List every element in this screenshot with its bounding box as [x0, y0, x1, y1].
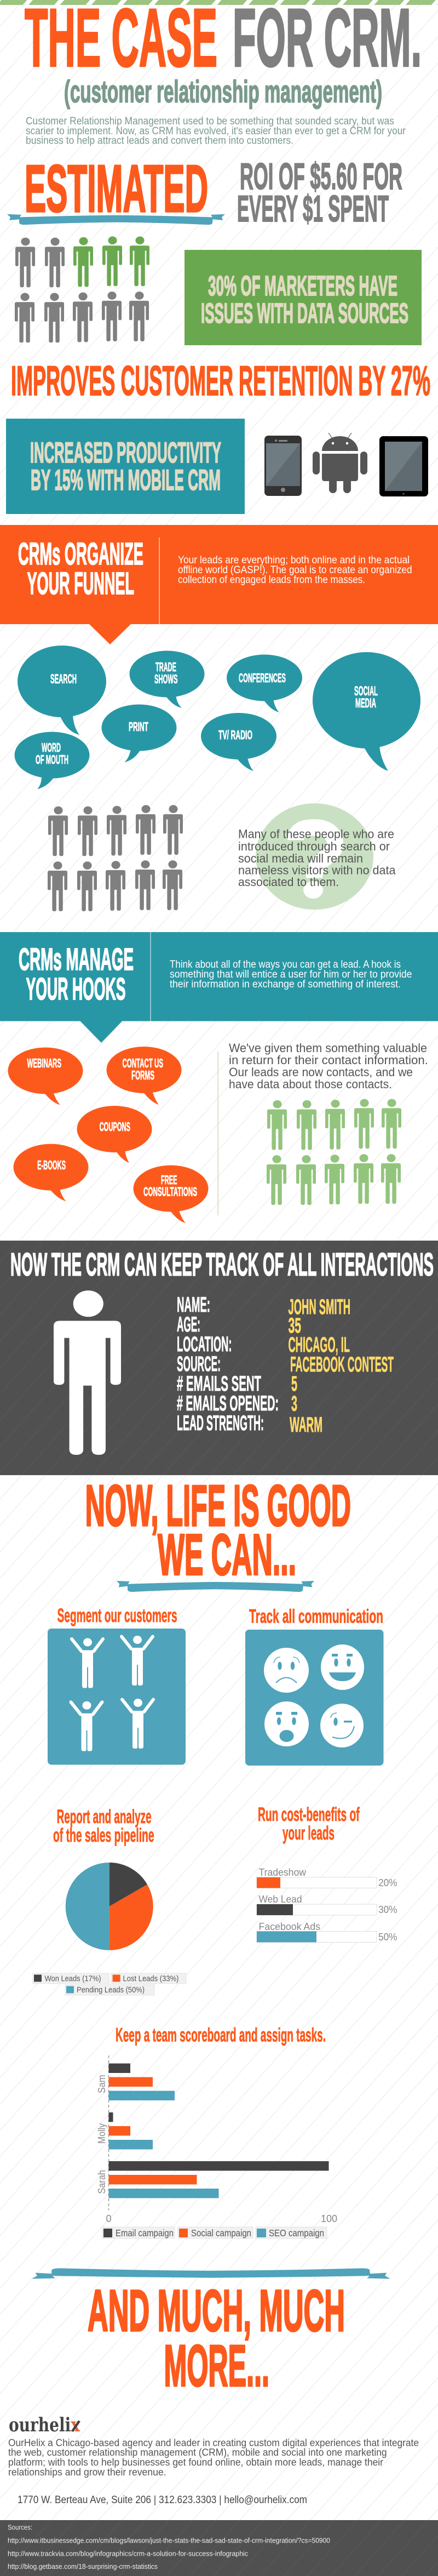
text: given them something valuable	[229, 1041, 428, 1091]
speech bubble: contact us forms	[106, 1047, 182, 1105]
text: nameless visitors: nameless visitors with no data	[238, 864, 396, 877]
intro paragraph	[26, 116, 406, 147]
icon: happy face	[321, 1644, 364, 1690]
speech bubble: conferences	[227, 654, 302, 712]
panel: CRMs organize your funnel: Your leads are everything; both online and in the actual	[178, 554, 410, 566]
speech bubble: trade shows: TRADE	[155, 660, 176, 674]
contact field labels	[177, 1293, 279, 1435]
heading: report and analyze: Report and analyze	[57, 1806, 152, 1827]
bar chart legend: Email campaign	[116, 2227, 174, 2238]
footer: sources: http://blog.getbase.com/18-surprising-crm-statistics	[8, 2562, 158, 2571]
icon: sad face	[264, 1648, 309, 1693]
text: about ourhelix: platform; with tools to help businesses get found online, obtain more leads, manage their	[8, 2457, 383, 2468]
bar chart: team scoreboard: 0	[106, 2213, 112, 2224]
bar chart legend: Social campaign	[191, 2227, 251, 2238]
icon: question mark circle	[256, 803, 373, 910]
heading: run cost-benefits: Run cost-benefits of	[258, 1804, 360, 1825]
speech bubble: search	[18, 646, 106, 735]
heading: report and analyze: of the sales pipeline	[53, 1825, 154, 1846]
heading: segment: Segment our customers	[57, 1605, 177, 1626]
speech bubble: webinars: WEBINARS	[27, 1056, 61, 1070]
footer: sources: Sources:	[8, 2523, 32, 2532]
contact field values: CHICAGO, IL	[288, 1333, 350, 1357]
text: given them something valuable: have data about those contacts.	[229, 1077, 392, 1091]
speech bubble: trade shows: SHOWS	[154, 672, 177, 686]
contact field values: JOHN SMITH	[288, 1295, 350, 1319]
panel: CRMs manage your hooks: their information in exchange of something of interest.	[170, 978, 401, 990]
text: nameless visitors: social media will remain	[238, 852, 363, 865]
speech bubble: coupons: COUPONS	[100, 1119, 130, 1134]
speech bubble: social media	[313, 652, 420, 771]
intro paragraph: business to help attract leads and convert them into customers.	[26, 135, 293, 147]
footer: sources: http://www.itbusinessedge.com/cm/blogs/lawson/just-the-stats-the-sad-sad-state-of-crm-integration/?cs=50900	[8, 2536, 330, 2545]
heading: now life is good: WE CAN...	[158, 1523, 296, 1587]
text: about ourhelix	[8, 2437, 419, 2478]
bar chart legend	[102, 2227, 327, 2238]
speech bubble: print: PRINT	[129, 719, 148, 734]
pie chart legend	[33, 1973, 186, 1995]
bar chart: team scoreboard	[96, 2055, 337, 2224]
icon: large person	[54, 1290, 121, 1455]
text: nameless visitors: Many of these people who are	[238, 827, 394, 841]
speech bubble: search: SEARCH	[50, 672, 77, 687]
text: given them something valuable: Our leads are now contacts, and we	[229, 1065, 413, 1079]
panel: CRMs manage your hooks: Think about all of the ways you can get a lead. A hook is	[170, 958, 401, 970]
icon: winking face	[320, 1704, 364, 1747]
contact field values: WARM	[290, 1413, 322, 1437]
panel: CRMs manage your hooks	[0, 932, 438, 1043]
speech bubble: free consultations	[134, 1165, 208, 1223]
panel: CRMs organize your funnel: CRMs ORGANIZE	[18, 536, 143, 572]
contact field values: 5	[291, 1372, 297, 1396]
text: nameless visitors: associated to them.	[238, 875, 339, 889]
heading: and much more with ribbon	[32, 2268, 390, 2398]
text: about ourhelix: the web, customer relationship management (CRM), mobile and social into one marketing	[8, 2447, 387, 2458]
icon group: ten gray people	[48, 805, 183, 911]
logo: ourhelix: ourhelix	[9, 2414, 80, 2436]
contact field labels: SOURCE:	[177, 1352, 221, 1376]
text: nameless visitors	[238, 827, 396, 889]
text: about ourhelix: relationships and grow their revenue.	[8, 2466, 166, 2478]
bar chart: team scoreboard: 100	[321, 2213, 337, 2224]
icon: android robot	[313, 433, 367, 493]
progress bars: cost benefits: Facebook Ads	[258, 1921, 320, 1932]
speech bubble: webinars	[8, 1048, 83, 1105]
panel: smiley faces	[245, 1630, 383, 1766]
ROI stat	[237, 156, 402, 230]
progress bars: cost benefits: Web Lead	[258, 1894, 302, 1905]
contact field labels: LEAD STRENGTH:	[177, 1412, 264, 1435]
panel: CRMs organize your funnel: YOUR FUNNEL	[27, 566, 134, 601]
progress bars: cost benefits: Tradeshow	[258, 1867, 307, 1878]
pie chart legend: Lost Leads (33%)	[123, 1974, 178, 1984]
heading: and much more with ribbon: MORE...	[164, 2333, 269, 2398]
panel: increased productivity: INCREASED PRODUCTIVITY	[30, 437, 221, 469]
contact field labels: LOCATION:	[177, 1333, 232, 1356]
panel: track all interactions	[0, 1241, 438, 1475]
footer: sources	[0, 2520, 438, 2576]
icon: surprised face	[264, 1701, 309, 1746]
intro paragraph: scarier to implement. Now, as CRM has evolved, it's easier than ever to get a CRM for your	[26, 125, 406, 137]
panel: CRMs manage your hooks: YOUR HOOKS	[26, 972, 126, 1007]
progress bars: cost benefits: 30%	[378, 1904, 397, 1915]
speech bubble: e-books	[13, 1144, 89, 1201]
speech bubble: word of mouth	[14, 732, 90, 789]
heading: report and analyze	[53, 1806, 154, 1846]
heading: run cost-benefits	[258, 1804, 360, 1844]
footer: sources: http://www.trackvia.com/blog/infographics/crm-a-solution-for-success-infographic	[8, 2549, 248, 2557]
bar chart: team scoreboard: Sarah	[96, 2170, 107, 2194]
text: about ourhelix: OurHelix a Chicago-based agency and leader in creating custom digital experiences that integrate	[8, 2437, 419, 2448]
speech bubble: print	[102, 705, 176, 762]
speech bubble: trade shows	[129, 651, 205, 708]
icon: smartphone	[264, 436, 302, 496]
speech bubble: social media: SOCIAL	[354, 684, 378, 699]
speech bubble: word of mouth: WORD	[42, 740, 61, 755]
panel: increased productivity	[6, 419, 245, 514]
speech bubble: word of mouth: OF MOUTH	[36, 752, 68, 767]
estimated heading with ribbon	[7, 151, 225, 226]
contact field labels: AGE:	[177, 1313, 200, 1336]
speech bubble: contact us forms: FORMS	[131, 1068, 154, 1082]
pie chart: leads	[66, 1863, 153, 1950]
progress bars: cost benefits: 50%	[378, 1932, 397, 1943]
panel: CRMs manage your hooks: CRMs MANAGE	[19, 942, 134, 977]
speech bubble: tv radio	[201, 713, 276, 771]
bar chart: team scoreboard: Sam	[96, 2075, 107, 2093]
contact field values	[288, 1295, 394, 1437]
panel: 30% of marketers	[185, 250, 422, 345]
speech bubble: free consultations: CONSULTATIONS	[143, 1185, 197, 1199]
panel: increased productivity: BY 15% WITH MOBILE CRM	[31, 464, 221, 496]
bar chart legend: SEO campaign	[269, 2227, 324, 2238]
speech bubble: conferences: CONFERENCES	[239, 671, 286, 685]
icon group: ten people, three green	[15, 236, 149, 342]
top stripe border	[0, 0, 438, 5]
pie chart legend: Pending Leads (50%)	[77, 1985, 145, 1995]
text: given them something valuable: in return for their contact information.	[229, 1053, 428, 1067]
icon: tablet	[379, 436, 428, 496]
contact field values: 35	[288, 1314, 301, 1338]
speech bubble: social media: MEDIA	[355, 696, 376, 711]
contact field values: 3	[291, 1392, 297, 1416]
contact field labels: # EMAILS OPENED:	[177, 1392, 279, 1415]
panel: CRMs organize your funnel: offline world (GASP!). The goal is to create an organized	[178, 564, 412, 576]
text: given them something valuable: We've given them something valuable	[229, 1041, 427, 1055]
panel: CRMs organize your funnel: collection of engaged leads from the masses.	[178, 574, 365, 586]
speech bubble: coupons	[77, 1106, 152, 1163]
text: nameless visitors: introduced through search or	[238, 839, 390, 853]
contact field labels: NAME:	[177, 1293, 210, 1317]
pie chart legend: Won Leads (17%)	[45, 1974, 101, 1984]
intro paragraph: Customer Relationship Management used to be something that sounded scary, but was	[26, 116, 394, 127]
heading: now life is good	[85, 1473, 351, 1592]
estimated heading with ribbon: ESTIMATED	[25, 151, 208, 226]
heading: run cost-benefits: your leads	[283, 1823, 335, 1844]
speech bubble: free consultations: FREE	[161, 1173, 177, 1187]
contact field labels: # EMAILS SENT	[177, 1372, 261, 1396]
bar chart: team scoreboard: Molly	[96, 2123, 107, 2144]
speech bubble: tv radio: TV/ RADIO	[218, 728, 252, 742]
icon group: ten green people	[267, 1099, 401, 1205]
speech bubble: contact us forms: CONTACT US	[123, 1056, 163, 1070]
progress bars: cost benefits: 20%	[378, 1877, 397, 1888]
panel: segment customers figures	[48, 1629, 186, 1764]
panel: CRMs organize your funnel	[0, 525, 438, 644]
panel: CRMs manage your hooks: something that will entice a user for him or her to provide	[170, 968, 412, 980]
progress bars: cost benefits	[257, 1867, 397, 1943]
text: address: 1770 W. Berteau Ave, Suite 206 | 312.623.3303 | hello@ourhelix.com	[18, 2494, 307, 2506]
speech bubble: e-books: E-BOOKS	[37, 1158, 66, 1172]
